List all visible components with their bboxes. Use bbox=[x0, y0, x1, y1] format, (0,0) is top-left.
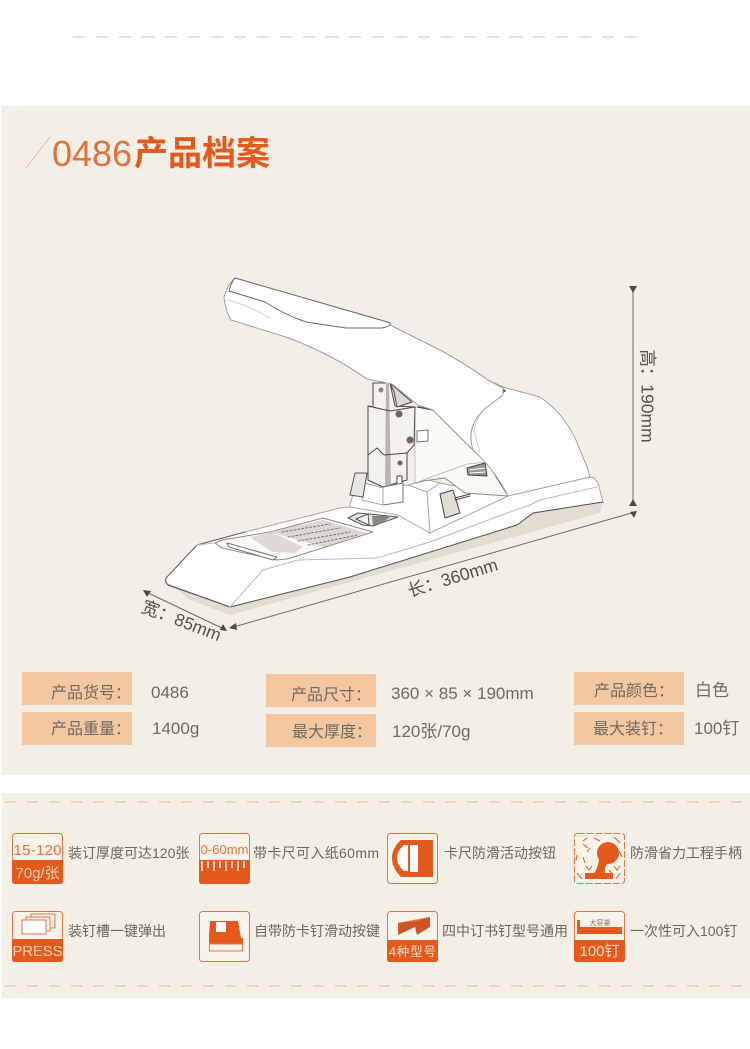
right side button bbox=[440, 490, 460, 518]
dimension: width: 宽：85mm bbox=[139, 596, 224, 645]
feature text 4: 防滑省力工程手柄 bbox=[630, 845, 742, 861]
spec: colour: 白色 bbox=[695, 681, 729, 700]
feature text 5: 装钉槽一键弹出 bbox=[68, 923, 166, 939]
spec: size: 产品尺寸： bbox=[291, 686, 371, 704]
icon: press eject: PRESS bbox=[12, 943, 62, 960]
spec: item number: 0486 bbox=[151, 683, 189, 702]
base shadow bbox=[165, 498, 603, 615]
icon: press eject bbox=[12, 912, 63, 962]
feature text 2: 带卡尺可入纸60mm bbox=[253, 845, 379, 861]
icon: ruler 0-60mm: 0-60mm bbox=[200, 842, 248, 857]
spec: colour bbox=[574, 672, 729, 705]
dimension: length bbox=[229, 511, 637, 630]
feature text 1: 装订厚度可达120张 bbox=[68, 845, 189, 861]
spec: weight bbox=[22, 712, 199, 745]
stapler base bbox=[166, 477, 603, 607]
feature text 6: 自带防卡钉滑动按键 bbox=[254, 923, 380, 939]
left side button bbox=[350, 473, 367, 497]
metal plate bbox=[415, 407, 487, 483]
panel: features bbox=[2, 793, 750, 998]
title: 0486 bbox=[52, 133, 132, 174]
icon: 4 staple types bbox=[387, 912, 438, 962]
icon: 15-120 sheets: 70g/张 bbox=[16, 865, 60, 882]
title bbox=[26, 133, 270, 174]
handle bbox=[224, 278, 503, 450]
central block bbox=[350, 480, 508, 533]
lower guide block bbox=[383, 483, 403, 505]
spec: max staples: 最大装钉： bbox=[593, 720, 673, 738]
dimension: height: 高：190mm bbox=[637, 349, 657, 443]
icon: 15-120 sheets bbox=[12, 834, 63, 884]
icon: 100 staples capacity: 大容量 bbox=[590, 918, 610, 927]
spec: size bbox=[266, 674, 534, 707]
feature text 8: 一次性可入100钉 bbox=[630, 923, 737, 939]
feature text 3: 卡尺防滑活动按钮 bbox=[444, 845, 556, 861]
feature text 7: 四中订书钉型号通用 bbox=[442, 923, 568, 939]
illustration: stapler bbox=[165, 278, 603, 615]
icon: 4 staple types: 4种型号 bbox=[389, 945, 436, 959]
icon: 15-120 sheets: 15-120 bbox=[14, 842, 62, 859]
spec: max staples: 100钉 bbox=[694, 719, 739, 738]
icon: jam-proof slide button bbox=[200, 912, 250, 962]
stapler head column bbox=[368, 383, 415, 487]
spec: max staples bbox=[574, 712, 739, 745]
icon: 100 staples capacity: 100钉 bbox=[579, 943, 620, 960]
dimension: height bbox=[629, 286, 657, 506]
icon: anti-slip slide button bbox=[388, 834, 438, 884]
spec: max thickness: 最大厚度： bbox=[292, 723, 372, 741]
spec: item number bbox=[22, 672, 189, 705]
icon: 100 staples capacity bbox=[574, 912, 625, 962]
spec: item number: 产品货号： bbox=[51, 684, 131, 702]
ruler plate and scale bbox=[215, 518, 373, 560]
spec: max thickness bbox=[266, 714, 470, 747]
handle grip pad bbox=[229, 278, 390, 328]
rear mechanism bbox=[415, 462, 508, 496]
dimension: length: 长：360mm bbox=[405, 554, 500, 601]
icon: ergonomic handle bbox=[574, 834, 624, 884]
icon: ruler 0-60mm bbox=[199, 834, 250, 884]
dome bbox=[471, 380, 590, 496]
panel: product profile bbox=[2, 106, 750, 775]
spec: colour: 产品颜色： bbox=[594, 682, 674, 700]
title: 产品档案 bbox=[134, 135, 270, 173]
base edges bbox=[197, 487, 597, 607]
spec: weight: 1400g bbox=[152, 719, 199, 738]
spec: max thickness: 120张/70g bbox=[392, 722, 470, 741]
spec: size: 360 × 85 × 190mm bbox=[391, 684, 534, 703]
spec: weight: 产品重量： bbox=[51, 720, 131, 738]
anvil window bbox=[348, 513, 398, 526]
